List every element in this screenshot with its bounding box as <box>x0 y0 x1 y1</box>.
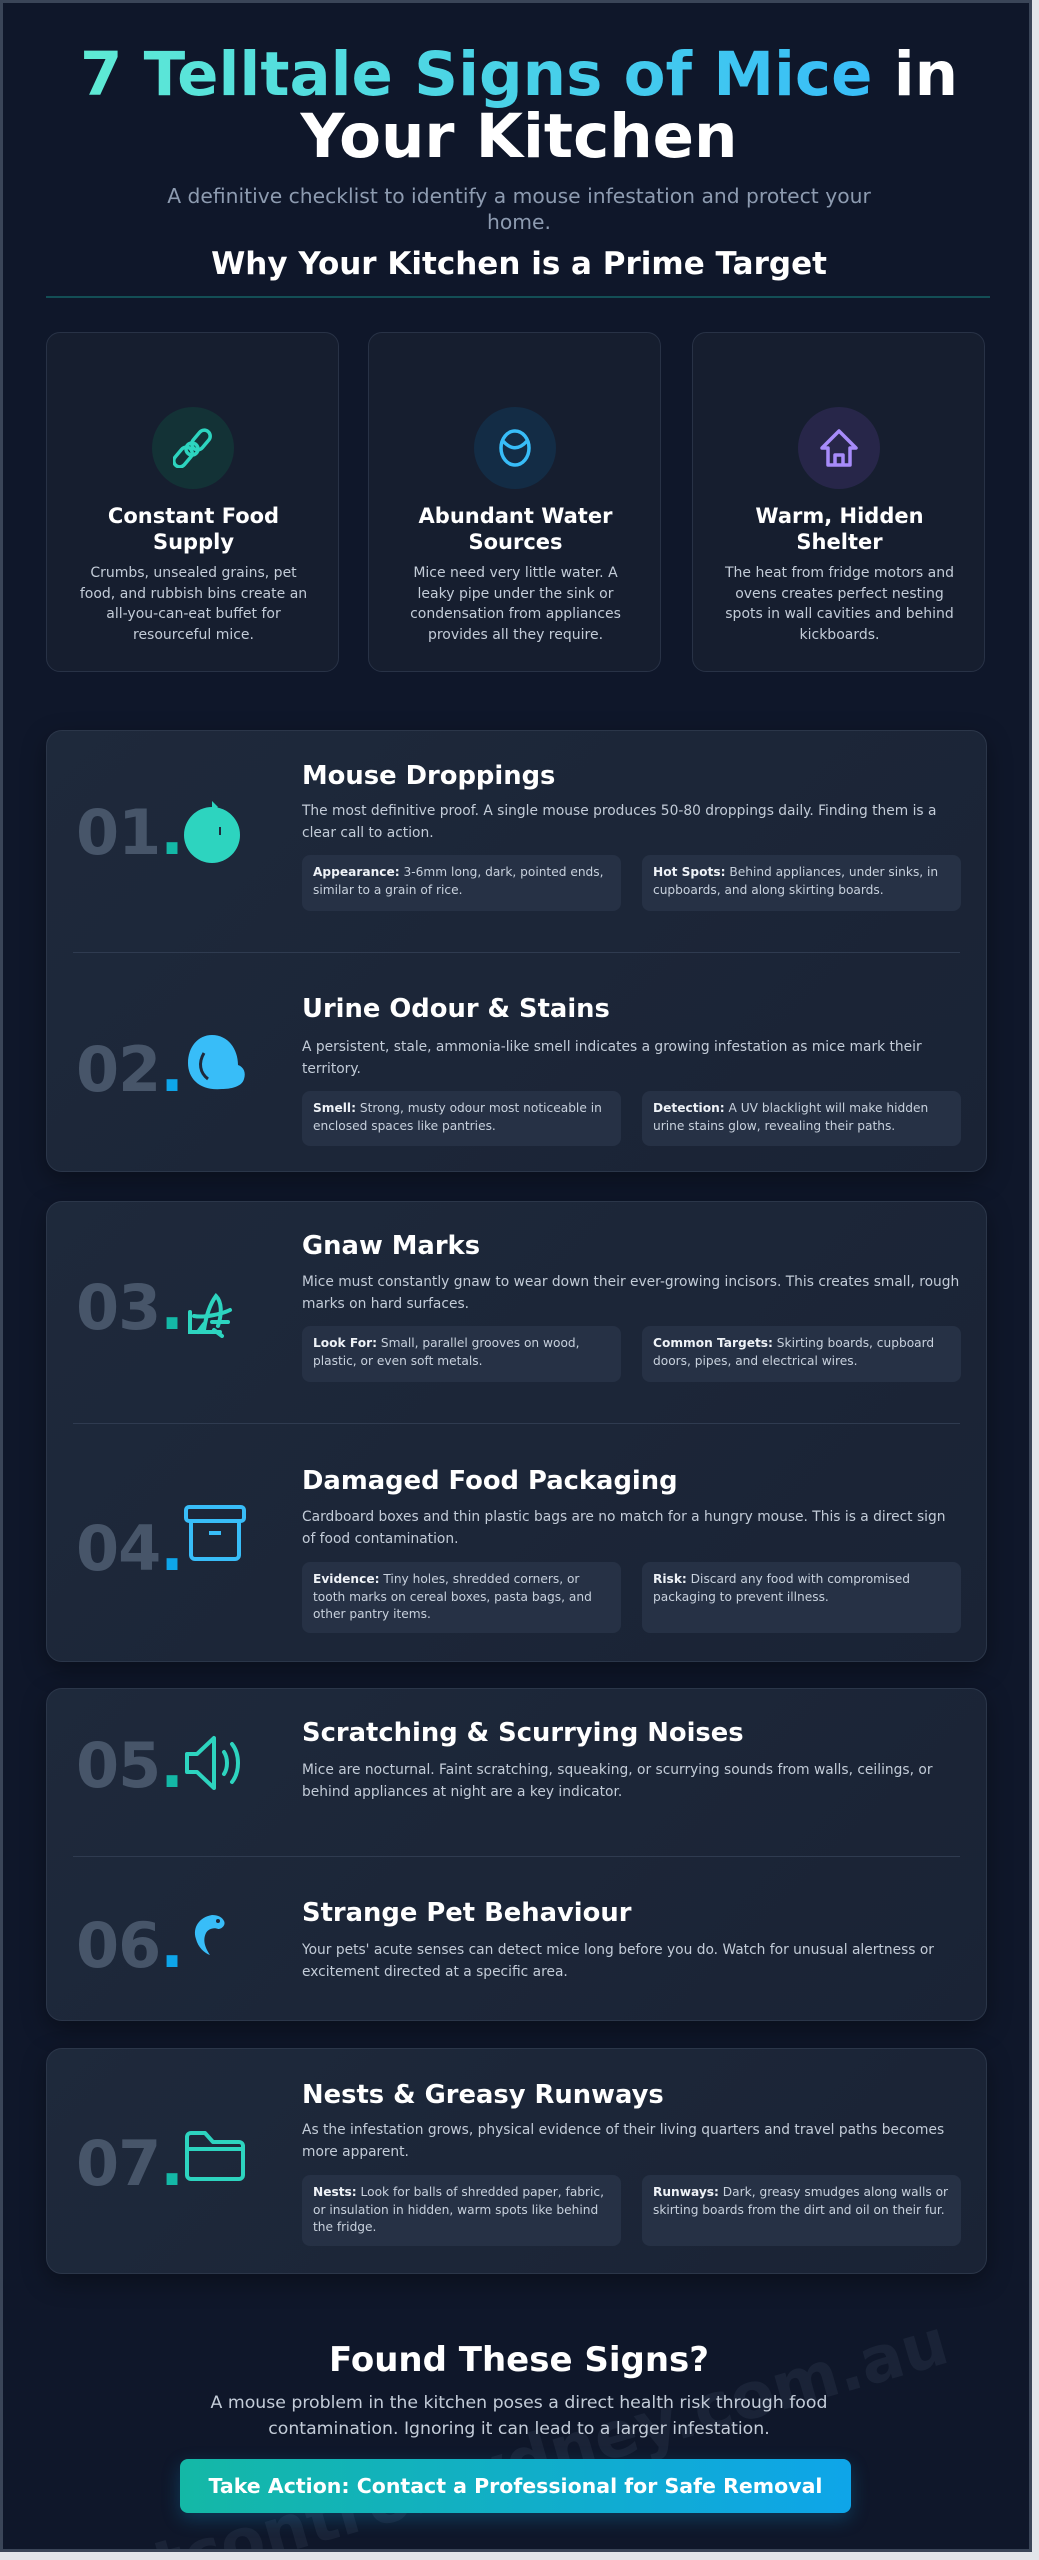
desc: The most definitive proof. A single mouse produces 50-80 droppings daily. Finding them is a clear call to action. <box>302 803 936 840</box>
card title: Sources <box>468 530 563 554</box>
title: noises: Scratching & Scurrying Noises <box>302 1718 744 1748</box>
footer heading: Found These Signs? <box>329 2340 709 2380</box>
box: runways <box>642 2175 961 2246</box>
box: evidence <box>302 1562 621 1633</box>
box: smell <box>302 1091 621 1146</box>
card title <box>755 504 924 554</box>
box: targets: Common Targets: Skirting boards, cupboard doors, pipes, and electrical wires. <box>653 1336 934 1368</box>
card title <box>418 504 612 554</box>
box: nests: Nests: Look for balls of shredded paper, fabric, or insulation in hidden, warm spots like behind the fridge. <box>313 2185 604 2234</box>
CTA button <box>180 2459 851 2513</box>
card title: Constant Food <box>108 504 279 528</box>
box: hot spots <box>642 855 961 911</box>
box: smell: Smell: Strong, musty odour most noticeable in enclosed spaces like pantries. <box>313 1101 602 1132</box>
title: Your Kitchen <box>301 101 737 172</box>
card text: Mice need very little water. A leaky pipe under the sink or condensation from appliances provides all they require. <box>410 565 621 643</box>
CTA button: Take Action: Contact a Professional for Safe Removal <box>209 2474 822 2498</box>
box: appearance <box>302 855 621 911</box>
box: look for <box>302 1326 621 1382</box>
number 06: 06. <box>76 1909 183 1982</box>
box: appearance: Appearance: 3-6mm long, dark, pointed ends, similar to a grain of rice. <box>313 865 604 896</box>
card title: Warm, Hidden <box>755 504 924 528</box>
icon: speaker <box>185 1736 240 1790</box>
footer text: A mouse problem in the kitchen poses a direct health risk through food contamination. Ignoring it can lead to a larger infestation. <box>211 2393 827 2439</box>
icon: link <box>152 407 234 489</box>
heading: why prime target: Why Your Kitchen is a Prime Target <box>211 246 827 282</box>
panel: warm shelter <box>692 332 985 672</box>
desc: Your pets' acute senses can detect mice long before you do. Watch for unusual alertness or excitement directed at a specific area. <box>302 1942 934 1980</box>
desc: Cardboard boxes and thin plastic bags are no match for a hungry mouse. This is a direct sign of food contamination. <box>302 1509 945 1546</box>
card text: Crumbs, unsealed grains, pet food, and rubbish bins create an all-you-can-eat buffet for resourceful mice. <box>80 565 307 643</box>
icon: dropping <box>184 801 240 863</box>
box: evidence: Evidence: Tiny holes, shredded corners, or tooth marks on cereal boxes, pasta bags, and other pantry items. <box>313 1572 592 1621</box>
box: nests <box>302 2175 621 2246</box>
number 07: 07. <box>76 2127 183 2200</box>
panel: signs 3-4 <box>46 1201 987 1662</box>
number 03: 03. <box>76 1271 183 1344</box>
box: risk <box>642 1562 961 1633</box>
box: targets <box>642 1326 961 1382</box>
title: 7 Telltale Signs of Mice in <box>80 39 958 110</box>
box: detection: Detection: A UV blacklight will make hidden urine stains glow, revealing their paths. <box>653 1101 928 1132</box>
icon: face <box>474 407 556 489</box>
card title: Shelter <box>796 530 883 554</box>
icon: archive <box>184 1505 246 1561</box>
icon: pet <box>194 1915 224 1955</box>
subtitle: A definitive checklist to identify a mouse infestation and protect your home. <box>167 184 871 234</box>
title: pet behaviour: Strange Pet Behaviour <box>302 1898 631 1928</box>
number 01: 01. <box>76 796 183 869</box>
desc: Mice are nocturnal. Faint scratching, squeaking, or scurrying sounds from walls, ceilings, or behind appliances at night are a key indicator. <box>302 1762 932 1800</box>
icon: house <box>798 407 880 489</box>
box: look for: Look For: Small, parallel grooves on wood, plastic, or even soft metals. <box>313 1336 580 1368</box>
icon: stain <box>188 1035 245 1090</box>
panel: signs 5-6 <box>46 1688 987 2021</box>
title: nests: Nests & Greasy Runways <box>302 2080 664 2110</box>
number 04: 04. <box>76 1512 183 1585</box>
panel: constant food supply <box>46 332 339 672</box>
icon: folder <box>185 2131 245 2181</box>
desc: As the infestation grows, physical evidence of their living quarters and travel paths becomes more apparent. <box>302 2122 944 2160</box>
title: damaged packaging: Damaged Food Packaging <box>302 1466 678 1496</box>
title: urine: Urine Odour & Stains <box>302 994 610 1024</box>
card title <box>108 504 279 554</box>
box: runways: Runways: Dark, greasy smudges along walls or skirting boards from the dirt and oil on their fur. <box>653 2185 948 2216</box>
card text: The heat from fridge motors and ovens creates perfect nesting spots in wall cavities and behind kickboards. <box>725 565 954 643</box>
card title: Supply <box>153 530 234 554</box>
number 05: 05. <box>76 1729 183 1802</box>
desc: A persistent, stale, ammonia-like smell indicates a growing infestation as mice mark their territory. <box>302 1039 922 1076</box>
title: mouse droppings: Mouse Droppings <box>302 761 555 791</box>
box: risk: Risk: Discard any food with compromised packaging to prevent illness. <box>653 1572 910 1604</box>
panel: abundant water <box>368 332 661 672</box>
panel: sign 7 <box>46 2048 987 2274</box>
card title: Abundant Water <box>419 504 612 528</box>
number 02: 02. <box>76 1033 183 1106</box>
box: hot spots: Hot Spots: Behind appliances, under sinks, in cupboards, and along skirting boards. <box>653 865 938 896</box>
panel: signs 1-2 <box>46 730 987 1172</box>
box: detection <box>642 1091 961 1146</box>
title <box>80 39 958 172</box>
title: gnaw marks: Gnaw Marks <box>302 1231 480 1261</box>
icon: gnaw <box>188 1293 232 1338</box>
desc: Mice must constantly gnaw to wear down their ever-growing incisors. This creates small, rough marks on hard surfaces. <box>302 1274 959 1312</box>
